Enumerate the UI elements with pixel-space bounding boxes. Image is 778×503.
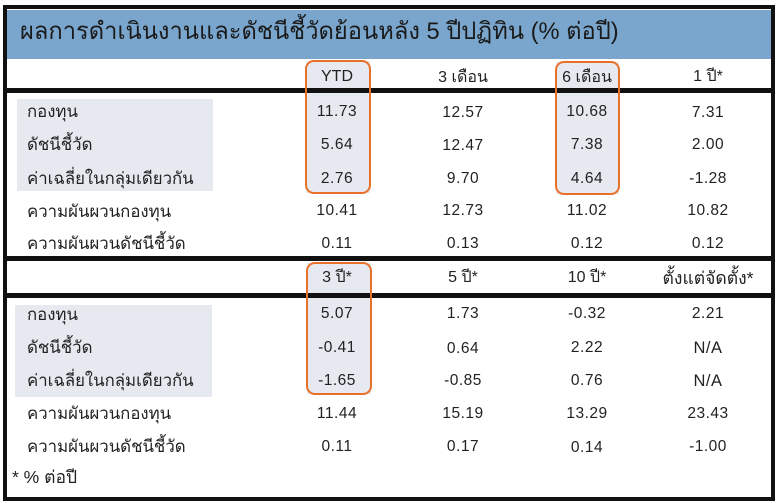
footnote: * % ต่อปี [12,467,77,487]
header: 3 months: 3 เดือน [438,69,488,86]
value YTD: 5.64 [321,136,353,153]
value 1 year: 0.12 [692,235,724,252]
title: ผลการดำเนินงานและดัชนีชี้วัดย้อนหลัง 5 ปีปฏิทิน (% ต่อปี) [20,19,619,45]
lower row: fund [27,305,724,324]
divider under lower header [5,293,773,298]
value 6 months: 7.38 [571,136,603,153]
label: ดัชนีชี้วัด [27,135,92,154]
panel: 6 month column highlight [556,62,619,194]
lower row: fund volatility [27,404,729,424]
lower row: benchmark volatility [27,434,727,456]
divider between tables [5,256,773,261]
value 3 months: 12.57 [442,104,484,121]
header: 6 months: 6 เดือน [562,69,612,86]
upper row: benchmark volatility [27,231,724,253]
value 10 years: 13.29 [566,405,608,422]
value 6 months: 4.64 [571,170,603,187]
value 3 years: 0.11 [321,438,353,455]
value YTD: 2.76 [321,170,353,187]
value 6 months: 11.02 [567,202,607,219]
value 3 months: 12.73 [442,202,484,219]
upper row: peer average [27,166,727,188]
label: ความผันผวนดัชนีชี้วัด [27,437,186,456]
upper row: benchmark [27,132,724,154]
label: ค่าเฉลี่ยในกลุ่มเดียวกัน [27,169,194,188]
callout: 6 month column outline [555,61,620,195]
header: since inception: ตั้งแต่จัดตั้ง* [663,268,753,288]
value since inception: N/A [693,339,722,357]
header: 5 years: 5 ปี* [448,269,478,286]
panel: YTD column highlight [306,61,370,193]
value YTD: 0.11 [321,235,353,252]
title band [7,10,772,59]
header: 3 years: 3 ปี* [322,269,352,286]
label: กองทุน [27,102,78,121]
values YTD: 11.73 [317,103,357,120]
divider under upper header [5,88,773,93]
value 1 year: -1.28 [689,170,727,187]
upper row: fund volatility [27,202,729,222]
value 6 months: 0.12 [571,235,603,252]
value 1 year: 10.82 [687,202,729,219]
label: กองทุน [27,305,78,324]
value 6 months: 10.68 [566,103,608,120]
label: ความผันผวนกองทุน [27,202,171,221]
value since inception: -1.00 [689,438,727,455]
callout: 3 year column outline [306,262,372,395]
value since inception: 2.21 [692,305,724,322]
value 3 years: -1.65 [318,372,356,389]
value 3 months: 12.47 [442,137,484,154]
value 10 years: 0.14 [571,439,603,456]
value 5 years: 15.19 [442,405,484,422]
value 3 months: 9.70 [447,170,479,187]
value 3 years: 11.44 [317,405,357,422]
upper header row [321,67,723,86]
value 3 months: 0.13 [447,235,479,252]
value 3 years: 5.07 [321,305,353,322]
callout: YTD column outline [305,60,371,194]
lower row: benchmark [27,335,722,357]
label: ดัชนีชี้วัด [27,338,92,357]
value 3 years: -0.41 [318,339,356,356]
value 10 years: 2.22 [571,339,603,356]
value since inception: N/A [693,372,722,390]
value 5 years: 0.17 [447,438,479,455]
value YTD: 10.41 [316,202,358,219]
panel: 3 year column highlight [307,263,371,394]
label: ความผันผวนกองทุน [27,404,171,423]
panel: row label highlight, lower table [15,305,212,397]
value 10 years: -0.32 [568,305,606,322]
header: 10 years: 10 ปี* [568,269,606,286]
upper row: fund [27,102,724,122]
value since inception: 23.43 [687,405,729,422]
value 1 year: 2.00 [692,136,724,153]
header: 1 year: 1 ปี* [693,68,723,85]
value 10 years: 0.76 [571,372,603,389]
value 1 year: 7.31 [692,104,724,121]
panel: row label highlight, upper table [17,99,213,191]
lower header row [322,265,754,288]
label: ความผันผวนดัชนีชี้วัด [27,234,186,253]
value 5 years: -0.85 [444,372,482,389]
header: YTD: YTD [321,68,353,85]
label: ค่าเฉลี่ยในกลุ่มเดียวกัน [27,371,194,390]
value 5 years: 0.64 [447,340,479,357]
value 5 years: 1.73 [447,305,479,322]
lower row: peer average [27,368,722,390]
